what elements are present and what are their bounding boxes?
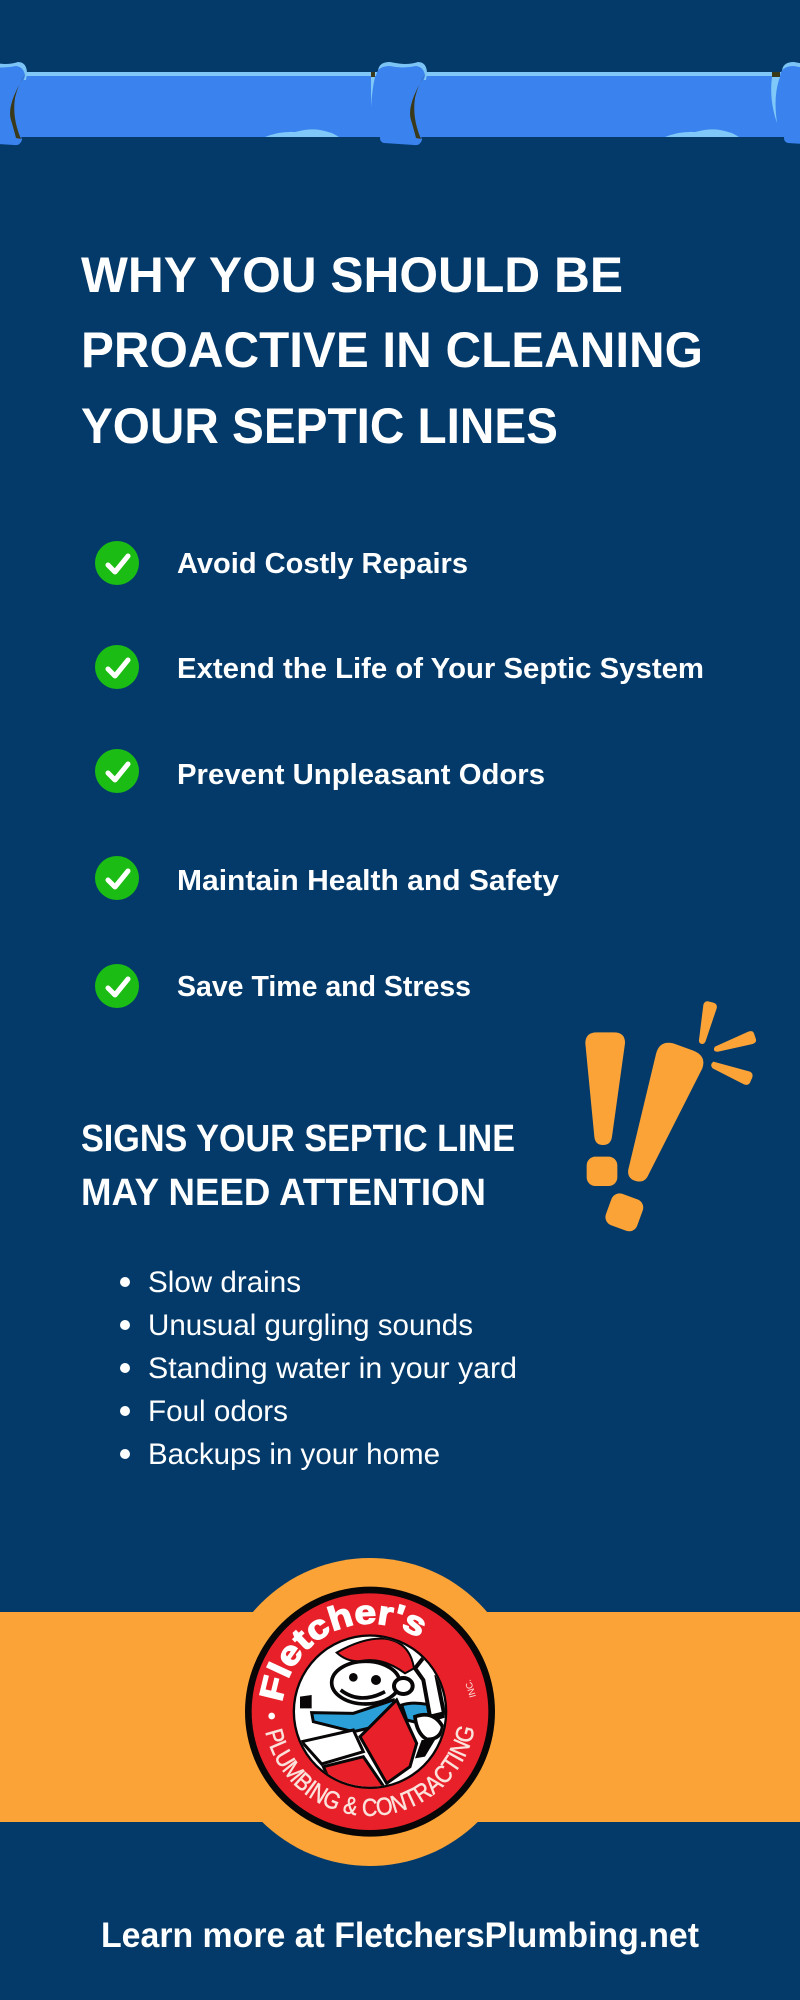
pipe illustration xyxy=(0,62,800,145)
item: avoid costly repairs: Avoid Costly Repairs xyxy=(177,548,468,580)
logo inc: INC. xyxy=(466,1680,476,1698)
title xyxy=(81,247,703,454)
item: prevent odors: Prevent Unpleasant Odors xyxy=(177,759,545,791)
item: save time xyxy=(95,964,471,1008)
item: extend the life: Extend the Life of Your Septic System xyxy=(177,653,704,685)
icon: exclamation marks xyxy=(585,1001,756,1234)
bullet list: Standing water in your yard xyxy=(148,1352,517,1385)
title: WHY YOU SHOULD BE xyxy=(81,247,623,303)
bullet list: Backups in your home xyxy=(148,1438,440,1471)
mascot xyxy=(295,1639,452,1788)
footer call to action: Learn more at FletchersPlumbing.net xyxy=(101,1916,699,1955)
orange band xyxy=(0,1612,800,1822)
logo backing circle xyxy=(216,1558,524,1866)
logo dot xyxy=(268,1713,275,1719)
heading: signs: MAY NEED ATTENTION xyxy=(81,1172,486,1214)
bullet list: Unusual gurgling sounds xyxy=(148,1309,473,1342)
item: maintain health xyxy=(95,856,559,900)
item: prevent odors xyxy=(95,749,545,793)
bullet list: Slow drains xyxy=(148,1266,301,1299)
heading: signs: SIGNS YOUR SEPTIC LINE xyxy=(81,1118,515,1160)
heading: signs xyxy=(81,1118,515,1214)
title: PROACTIVE IN CLEANING xyxy=(81,322,703,378)
item: maintain health: Maintain Health and Safety xyxy=(177,865,559,897)
item: avoid costly repairs xyxy=(95,541,468,585)
logo subtitle: PLUMBING & CONTRACTING xyxy=(265,1726,474,1816)
item: extend the life xyxy=(95,645,704,689)
bullet list: Foul odors xyxy=(148,1395,288,1428)
bullet list xyxy=(120,1266,517,1471)
logo wordmark: Fletcher's xyxy=(259,1604,425,1701)
logo xyxy=(245,1586,495,1837)
checklist xyxy=(95,541,704,1008)
item: save time: Save Time and Stress xyxy=(177,971,471,1003)
title: YOUR SEPTIC LINES xyxy=(81,398,558,454)
